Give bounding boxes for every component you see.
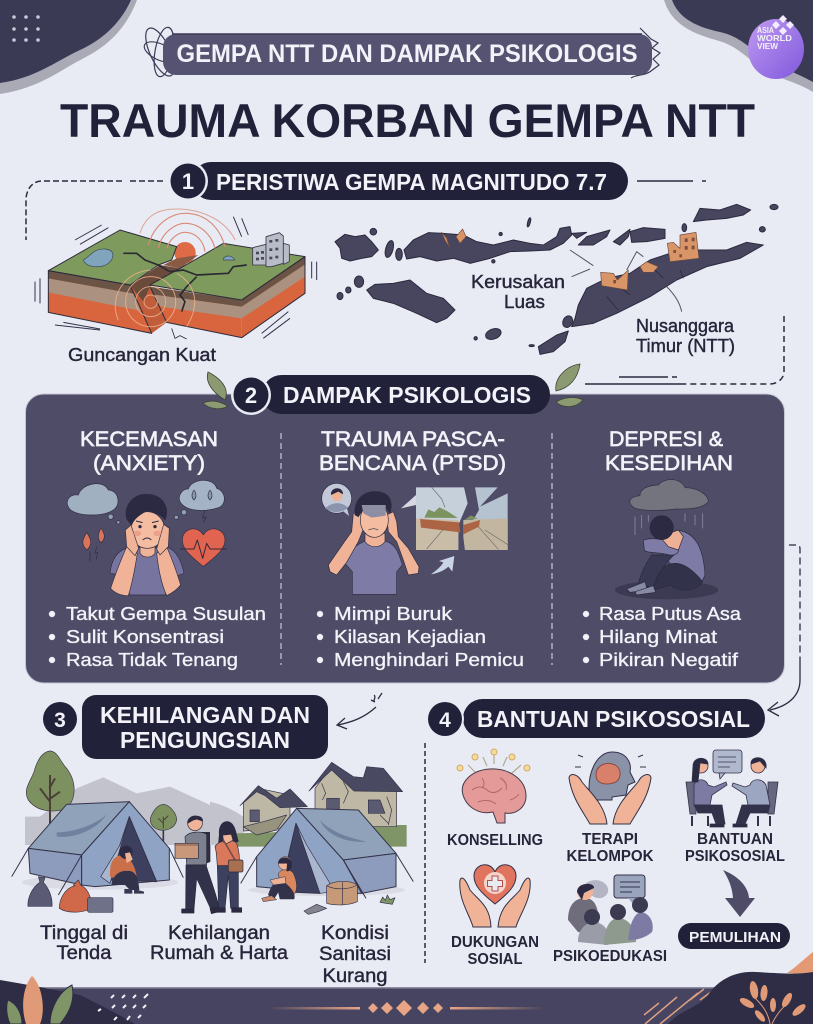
section 1 heading: PERISTIWA GEMPA MAGNITUDO 7.7 xyxy=(216,169,607,195)
labels: section 3: Kurang xyxy=(322,966,388,987)
logo: Asia World View xyxy=(748,15,804,79)
section 2 heading: 2 xyxy=(245,383,257,408)
footer sprig xyxy=(738,980,807,1024)
footer slashes xyxy=(98,994,148,1020)
right face xyxy=(242,257,305,338)
section 3 heading: 3 xyxy=(54,709,66,732)
list: PTSD: Kilasan Kejadian xyxy=(334,627,486,647)
illustration: PTSD person and fractured memory xyxy=(322,483,508,594)
map: NTT islands xyxy=(335,204,778,354)
labels: section 3: Tenda xyxy=(56,943,112,964)
label: Kerusakan Luas: Kerusakan xyxy=(471,272,565,292)
label: terapi kelompok: TERAPI xyxy=(582,831,638,848)
illustration: anxious person xyxy=(67,480,227,596)
footer corner right xyxy=(787,952,813,975)
arrow: to pemulihan xyxy=(723,870,755,917)
list: kecemasan: Takut Gempa Susulan xyxy=(66,604,266,624)
decorative corner: top right xyxy=(664,0,813,92)
solid connector: map frame xyxy=(585,377,686,384)
section 2 heading xyxy=(231,375,550,415)
panel: dampak psikologis xyxy=(26,394,784,683)
section 3 heading: PENGUNGSIAN xyxy=(120,727,290,753)
top banner: GEMPA NTT DAN DAMPAK PSIKOLOGIS xyxy=(176,40,638,68)
pemulihan pill xyxy=(678,923,790,949)
left part of camp xyxy=(12,751,243,914)
list: depresi: Pikiran Negatif xyxy=(599,650,739,670)
woman xyxy=(215,822,243,912)
footer leaves xyxy=(7,976,73,1024)
arrow: section 2 to section 4 xyxy=(768,545,800,716)
labels: section 3: Kehilangan xyxy=(168,923,270,944)
list: depresi xyxy=(583,604,742,670)
fractured picture xyxy=(401,495,416,508)
labels: section 3: Kondisi xyxy=(321,923,389,944)
label: dukungan sosial: SOSIAL xyxy=(468,951,523,968)
label: terapi kelompok xyxy=(566,831,654,865)
section 1 heading: 1 xyxy=(182,169,194,194)
list: kecemasan: Rasa Tidak Tenang xyxy=(66,650,238,670)
heading: depresi xyxy=(605,428,733,475)
building xyxy=(253,233,289,267)
damaged houses xyxy=(237,762,407,847)
list: kecemasan xyxy=(49,604,266,670)
section 1 heading xyxy=(168,161,628,201)
heading: depresi: DEPRESI & xyxy=(609,428,723,451)
heading: kecemasan: (ANXIETY) xyxy=(93,452,205,475)
label: Nusanggara Timur (NTT) xyxy=(636,316,735,356)
logo: Asia World View: VIEW xyxy=(757,41,779,51)
logo: Asia World View: WORLD xyxy=(757,33,792,43)
heading: kecemasan xyxy=(80,428,218,475)
leaves: section 2 right xyxy=(556,364,583,407)
label: dukungan sosial xyxy=(451,934,539,968)
front face xyxy=(150,287,242,338)
heading: PTSD xyxy=(319,428,506,475)
arrow: section 2 to section 3 xyxy=(337,693,382,729)
label: Kerusakan Luas: Luas xyxy=(504,292,545,312)
label: dukungan sosial: DUKUNGAN xyxy=(451,934,539,951)
dashed connector: map frame xyxy=(686,316,784,384)
person sitting in left tent xyxy=(110,855,137,882)
tent right xyxy=(241,808,413,898)
list: kecemasan: Sulit Konsentrasi xyxy=(66,627,224,647)
section 4 heading: 4 xyxy=(439,709,451,732)
section 2 heading: DAMPAK PSIKOLOGIS xyxy=(283,382,531,408)
heading: PTSD: TRAUMA PASCA- xyxy=(321,428,505,451)
label: psikoedukasi: PSIKOEDUKASI xyxy=(553,948,667,965)
label: Nusanggara Timur (NTT): Timur (NTT) xyxy=(636,336,735,356)
label: terapi kelompok: KELOMPOK xyxy=(566,848,654,865)
decorative corner: top left xyxy=(0,0,137,94)
list: PTSD: Mimpi Buruk xyxy=(334,604,453,624)
illustration: sad person under rain cloud xyxy=(615,480,718,599)
labels: section 3 xyxy=(40,923,391,987)
pemulihan pill: PEMULIHAN xyxy=(689,929,781,946)
section 4 heading: BANTUAN PSIKOSOSIAL xyxy=(477,706,750,732)
belongings xyxy=(28,877,113,912)
section 3 heading xyxy=(43,695,328,759)
dashed connector: section 1 xyxy=(26,181,163,240)
illustration: refugee camp xyxy=(12,751,413,914)
belongings right xyxy=(304,881,395,914)
title: TRAUMA KORBAN GEMPA NTT xyxy=(60,94,755,147)
icon: brain xyxy=(457,749,530,823)
shake marks xyxy=(35,217,317,338)
heading: depresi: KESEDIHAN xyxy=(605,452,733,475)
logo: Asia World View: ASIA xyxy=(757,25,774,35)
heading: kecemasan: KECEMASAN xyxy=(80,428,218,451)
green tops xyxy=(48,230,177,285)
label: Kerusakan Luas xyxy=(471,272,565,312)
footer band xyxy=(0,952,813,1024)
labels: section 3: Sanitasi xyxy=(319,944,391,965)
list: depresi: Hilang Minat xyxy=(599,627,717,647)
person xyxy=(345,541,402,594)
illustration: earthquake block xyxy=(35,209,317,339)
labels: section 3: Tinggal di xyxy=(40,923,128,944)
label: Nusanggara Timur (NTT): Nusanggara xyxy=(636,316,735,336)
label: bantuan psikososial: BANTUAN xyxy=(697,831,773,848)
lake xyxy=(83,249,113,267)
cracks xyxy=(123,253,247,312)
list: depresi: Rasa Putus Asa xyxy=(599,604,742,624)
section 4 heading xyxy=(426,699,765,738)
damage markers xyxy=(442,229,699,290)
section 3 heading: KEHILANGAN DAN xyxy=(100,702,310,728)
dashed connector: section 1 right xyxy=(637,180,706,182)
label: Guncangan Kuat: Guncangan Kuat xyxy=(68,345,216,365)
footer ornament xyxy=(268,1000,545,1016)
footer stripes xyxy=(644,989,715,1024)
label: bantuan psikososial xyxy=(685,831,785,865)
gap xyxy=(130,285,167,333)
seismic rings top xyxy=(140,209,235,252)
labels: section 3: Rumah & Harta xyxy=(150,943,288,964)
label: konselling: KONSELLING xyxy=(447,832,543,849)
icon: counselling conversation xyxy=(686,750,778,827)
top banner xyxy=(140,24,660,80)
right part of camp xyxy=(210,762,413,914)
heading: PTSD: BENCANA (PTSD) xyxy=(319,452,506,475)
icon: heart in hands xyxy=(460,865,530,927)
list: PTSD xyxy=(317,604,524,670)
label: bantuan psikososial: PSIKOSOSIAL xyxy=(685,848,785,865)
person sitting in right tent xyxy=(262,857,297,902)
man with box xyxy=(175,816,221,914)
icon: therapy hands and head xyxy=(569,752,651,824)
leaves: section 2 left xyxy=(203,372,228,409)
left face xyxy=(48,271,152,333)
list: PTSD: Menghindari Pemicu xyxy=(334,650,524,670)
icon: psychoeducation group xyxy=(568,875,653,945)
